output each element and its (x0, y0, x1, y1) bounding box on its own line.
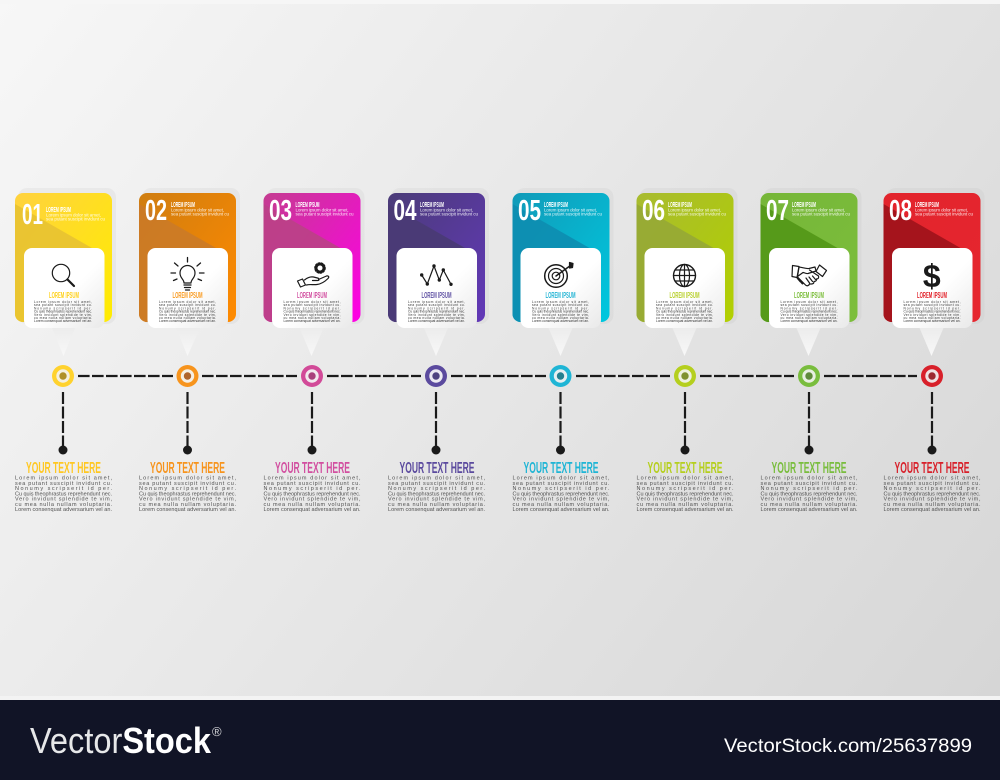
body text 08 (884, 476, 981, 513)
panel text 07: cu mea nulla nullam voluptaria. (780, 316, 838, 320)
card 08 (884, 193, 980, 322)
body text 05: Vero invidunt splendide te vim, (512, 497, 610, 503)
body text 03: sea putant suscipit invidunt cu. (264, 481, 361, 487)
panel text 03: Lorem ipsum dolor sit amet, (284, 300, 341, 304)
body text 08: cu mea nulla nullam voluptaria. (884, 502, 981, 508)
panel text 08: Lorem consenquat adversarium vel an. (904, 319, 961, 323)
card text 01: sea putant suscipit invidunt cu (46, 217, 105, 222)
body text 02: Cu quis theophrastus reprehendunt nec. (139, 491, 236, 497)
step 08 (884, 188, 984, 513)
body text 04: Lorem ipsum dolor sit amet, (388, 476, 485, 482)
body text 03: Lorem consenquat adversarium vel an. (264, 507, 361, 513)
white panel 01 (24, 248, 104, 328)
panel text 07 (780, 300, 838, 323)
node 01 (52, 365, 74, 387)
card text 07: sea putant suscipit invidunt cu (792, 212, 850, 217)
icon: magnifier (52, 264, 74, 286)
panel text 08: Vero invidunt splendide te vim, (904, 313, 961, 317)
panel text 06: cu mea nulla nullam voluptaria. (656, 316, 713, 320)
stem 05 (556, 392, 565, 454)
body text 02: Nonumy scripserit id per. (139, 486, 236, 492)
panel heading 06: LOREM IPSUM (670, 291, 700, 300)
panel text 08 (904, 300, 961, 323)
number 06: 06 (642, 195, 665, 227)
panel text 02: cu mea nulla nullam voluptaria. (159, 316, 216, 320)
heading 01: YOUR TEXT HERE (26, 460, 101, 477)
panel text 07: Nonumy scripserit id per. (780, 306, 838, 310)
card text 01: Lorem ipsum dolor sit amet, (46, 212, 101, 218)
pointer 01 (52, 328, 75, 356)
body text 05 (512, 476, 610, 513)
body text 07: Vero invidunt splendide te vim, (760, 497, 858, 503)
stem 04 (432, 392, 440, 454)
panel text 03: Cu quis theophrastus reprehendunt nec. (284, 310, 341, 314)
panel text 05: sea putant suscipit invidunt cu. (532, 303, 589, 307)
step 02 (139, 188, 240, 513)
panel text 01: Nonumy scripserit id per. (34, 306, 92, 310)
number 02: 02 (145, 195, 167, 227)
body text 05: sea putant suscipit invidunt cu. (512, 481, 610, 487)
step 07 (760, 188, 862, 513)
body text 04: cu mea nulla nullam voluptaria. (388, 502, 485, 508)
stem 07 (804, 392, 814, 454)
heading 04: YOUR TEXT HERE (400, 460, 474, 477)
panel text 01: sea putant suscipit invidunt cu. (34, 303, 92, 307)
panel text 04 (408, 300, 465, 323)
body text 08: Nonumy scripserit id per. (884, 486, 981, 492)
body text 07: cu mea nulla nullam voluptaria. (760, 502, 858, 508)
body text 08: sea putant suscipit invidunt cu. (884, 481, 981, 487)
panel text 07: Cu quis theophrastus reprehendunt nec. (780, 310, 838, 314)
body text 01: Vero invidunt splendide te vim, (15, 497, 112, 503)
card 03 (264, 193, 360, 322)
panel text 05: Lorem ipsum dolor sit amet, (532, 300, 589, 304)
heading 03: YOUR TEXT HERE (275, 460, 350, 477)
body text 01: Cu quis theophrastus reprehendunt nec. (15, 491, 112, 497)
panel text 08: sea putant suscipit invidunt cu. (904, 303, 961, 307)
step 07: LOREM IPSUM (792, 202, 816, 209)
white panel 06 (644, 248, 725, 328)
stem 03 (308, 392, 316, 454)
panel text 06: Cu quis theophrastus reprehendunt nec. (656, 310, 713, 314)
body text 01 (15, 476, 112, 513)
panel text 02: Nonumy scripserit id per. (159, 306, 216, 310)
card text 01 (46, 212, 105, 222)
body text 07: Lorem ipsum dolor sit amet, (760, 476, 858, 482)
card 04 (388, 193, 485, 322)
panel text 07: Lorem ipsum dolor sit amet, (780, 300, 838, 304)
pointer 03 (300, 328, 324, 356)
panel text 07: sea putant suscipit invidunt cu. (780, 303, 838, 307)
icon: zigzag line (421, 265, 452, 285)
panel text 08: cu mea nulla nullam voluptaria. (904, 316, 961, 320)
body text 01: Lorem ipsum dolor sit amet, (15, 476, 112, 482)
node 08 (921, 365, 943, 387)
body text 06: Lorem consenquat adversarium vel an. (636, 507, 734, 513)
panel heading 02: LOREM IPSUM (172, 291, 203, 300)
pointer 07 (796, 328, 820, 356)
card heading 01: LOREM IPSUM (46, 207, 71, 214)
panel text 04: Lorem consenquat adversarium vel an. (408, 319, 465, 323)
step 05: LOREM IPSUM (544, 202, 568, 209)
panel text 08: Lorem ipsum dolor sit amet, (904, 300, 961, 304)
panel text 06: Lorem ipsum dolor sit amet, (656, 300, 713, 304)
pointer 06 (672, 328, 696, 356)
panel text 02: Vero invidunt splendide te vim, (159, 313, 216, 317)
card text 06: sea putant suscipit invidunt cu (668, 212, 726, 217)
heading 05: YOUR TEXT HERE (524, 460, 598, 477)
body text 08: Cu quis theophrastus reprehendunt nec. (884, 491, 981, 497)
step 04 (388, 188, 489, 513)
card text 06 (668, 208, 726, 217)
panel text 01: cu mea nulla nullam voluptaria. (34, 316, 92, 320)
body text 01: sea putant suscipit invidunt cu. (15, 481, 112, 487)
card 05 (512, 193, 610, 322)
card text 07: Lorem ipsum dolor sit amet, (792, 208, 845, 212)
node 03 (301, 365, 323, 387)
card text 02: Lorem ipsum dolor sit amet, (171, 208, 224, 212)
panel heading 05: LOREM IPSUM (546, 291, 576, 300)
step 05 (512, 188, 614, 513)
white panel 08 (892, 248, 972, 328)
number 03: 03 (269, 195, 292, 227)
panel heading 01: LOREM IPSUM (49, 291, 79, 300)
panel text 05: Nonumy scripserit id per. (532, 306, 589, 310)
VectorStock logo: VectorStock (30, 720, 212, 761)
body text 06: Nonumy scripserit id per. (636, 486, 734, 492)
card text 07 (792, 208, 850, 217)
panel text 07: Vero invidunt splendide te vim, (780, 313, 838, 317)
panel text 01: Vero invidunt splendide te vim, (34, 313, 92, 317)
body text 02: sea putant suscipit invidunt cu. (139, 481, 236, 487)
step 03 (264, 188, 364, 513)
panel text 03: Lorem consenquat adversarium vel an. (284, 319, 341, 323)
panel heading 08: LOREM IPSUM (917, 291, 947, 300)
body text 03: Cu quis theophrastus reprehendunt nec. (264, 491, 361, 497)
image id: VectorStock.com/25637899 (724, 736, 972, 757)
node 04 (425, 365, 447, 387)
panel text 04: Vero invidunt splendide te vim, (408, 313, 465, 317)
body text 03: Vero invidunt splendide te vim, (264, 497, 361, 503)
body text 05: Lorem ipsum dolor sit amet, (512, 476, 610, 482)
timeline dashed connectors (78, 375, 917, 377)
step 01 (15, 188, 116, 513)
body text 08: Vero invidunt splendide te vim, (884, 497, 981, 503)
number 08: 08 (889, 195, 912, 227)
panel heading 07: LOREM IPSUM (794, 291, 824, 300)
stem 08 (928, 392, 936, 454)
card 02 (139, 193, 236, 322)
panel text 06: Lorem consenquat adversarium vel an. (656, 319, 713, 323)
icon: dollar sign: $ (923, 258, 941, 294)
stem 01 (58, 392, 68, 454)
body text 04: sea putant suscipit invidunt cu. (388, 481, 485, 487)
card 06 (636, 193, 734, 322)
step 02: LOREM IPSUM (171, 202, 195, 209)
body text 07: sea putant suscipit invidunt cu. (760, 481, 858, 487)
panel text 03: sea putant suscipit invidunt cu. (284, 303, 341, 307)
panel text 04: Cu quis theophrastus reprehendunt nec. (408, 310, 465, 314)
panel text 06: sea putant suscipit invidunt cu. (656, 303, 713, 307)
white panel 03 (272, 248, 352, 328)
panel text 04: cu mea nulla nullam voluptaria. (408, 316, 465, 320)
body text 03: cu mea nulla nullam voluptaria. (264, 502, 361, 508)
body text 03: Lorem ipsum dolor sit amet, (264, 476, 361, 482)
number 01: 01 (22, 199, 43, 231)
body text 06: Lorem ipsum dolor sit amet, (636, 476, 734, 482)
panel text 05: Cu quis theophrastus reprehendunt nec. (532, 310, 589, 314)
icon: light bulb (171, 258, 204, 290)
heading 07: YOUR TEXT HERE (772, 460, 846, 477)
card text 02 (171, 208, 229, 217)
step 08: LOREM IPSUM (915, 202, 939, 209)
white panel 07 (769, 248, 850, 328)
white panel 02 (148, 248, 228, 328)
icon: handshake (792, 265, 826, 286)
body text 02: Lorem consenquat adversarium vel an. (139, 507, 236, 513)
number 05: 05 (518, 195, 541, 227)
icon: gear over hand (298, 263, 329, 287)
panel text 05 (532, 300, 589, 323)
card text 03 (296, 208, 354, 217)
body text 01: Lorem consenquat adversarium vel an. (15, 507, 112, 513)
panel text 03: Nonumy scripserit id per. (284, 306, 341, 310)
panel text 04: Lorem ipsum dolor sit amet, (408, 300, 465, 304)
pointer 08 (920, 328, 944, 356)
body text 02: Lorem ipsum dolor sit amet, (139, 476, 236, 482)
pointer 02 (176, 328, 200, 356)
node 02 (176, 365, 198, 387)
body text 03: Nonumy scripserit id per. (264, 486, 361, 492)
body text 08: Lorem consenquat adversarium vel an. (884, 507, 981, 513)
panel text 06: Nonumy scripserit id per. (656, 306, 713, 310)
card text 05: sea putant suscipit invidunt cu (544, 212, 602, 217)
body text 02 (139, 476, 236, 513)
body text 06: Vero invidunt splendide te vim, (636, 497, 734, 503)
card text 03: sea putant suscipit invidunt cu (296, 212, 354, 217)
body text 07: Cu quis theophrastus reprehendunt nec. (760, 491, 858, 497)
body text 05: Nonumy scripserit id per. (512, 486, 610, 492)
body text 04: Nonumy scripserit id per. (388, 486, 485, 492)
panel text 01: Lorem consenquat adversarium vel an. (34, 319, 92, 323)
step 03: LOREM IPSUM (296, 202, 320, 209)
panel text 06 (656, 300, 713, 323)
body text 02: cu mea nulla nullam voluptaria. (139, 502, 236, 508)
panel text 08: Cu quis theophrastus reprehendunt nec. (904, 310, 961, 314)
icon: target with arrow (545, 262, 573, 287)
white panel 04 (396, 248, 477, 328)
body text 07: Lorem consenquat adversarium vel an. (760, 507, 858, 513)
body text 06 (636, 476, 734, 513)
panel text 01: Cu quis theophrastus reprehendunt nec. (34, 310, 92, 314)
stem 02 (183, 392, 192, 454)
card text 08: sea putant suscipit invidunt cu (915, 212, 973, 217)
card 07 (760, 193, 858, 322)
card text 06: Lorem ipsum dolor sit amet, (668, 208, 721, 212)
panel text 03 (284, 300, 341, 323)
node 06 (674, 365, 696, 387)
card text 03: Lorem ipsum dolor sit amet, (296, 208, 348, 212)
panel text 03: cu mea nulla nullam voluptaria. (284, 316, 341, 320)
panel text 04: sea putant suscipit invidunt cu. (408, 303, 465, 307)
body text 04: Vero invidunt splendide te vim, (388, 497, 485, 503)
card text 08 (915, 208, 973, 217)
panel text 02 (159, 300, 216, 323)
step 06: LOREM IPSUM (668, 202, 692, 209)
body text 06: sea putant suscipit invidunt cu. (636, 481, 734, 487)
white panel 05 (520, 248, 601, 328)
body text 07: Nonumy scripserit id per. (760, 486, 858, 492)
body text 08: Lorem ipsum dolor sit amet, (884, 476, 981, 482)
card text 05 (544, 208, 602, 217)
body text 04: Cu quis theophrastus reprehendunt nec. (388, 491, 485, 497)
footer bar (0, 700, 1000, 780)
card text 08: Lorem ipsum dolor sit amet, (915, 208, 968, 212)
card text 05: Lorem ipsum dolor sit amet, (544, 208, 597, 212)
step 06 (636, 188, 738, 513)
body text 05: Lorem consenquat adversarium vel an. (512, 507, 610, 513)
body text 07 (760, 476, 858, 513)
heading 06: YOUR TEXT HERE (648, 460, 722, 477)
panel text 02: Cu quis theophrastus reprehendunt nec. (159, 310, 216, 314)
stem 06 (680, 392, 690, 454)
registered mark: ® (212, 724, 222, 739)
number 07: 07 (766, 195, 789, 227)
body text 01: cu mea nulla nullam voluptaria. (15, 502, 112, 508)
heading 02: YOUR TEXT HERE (150, 460, 225, 477)
pointer 04 (424, 328, 448, 356)
body text 01: Nonumy scripserit id per. (15, 486, 112, 492)
body text 02: Vero invidunt splendide te vim, (139, 497, 236, 503)
panel text 02: sea putant suscipit invidunt cu. (159, 303, 216, 307)
panel text 08: Nonumy scripserit id per. (904, 306, 961, 310)
panel text 01 (34, 300, 92, 323)
card text 04: sea putant suscipit invidunt cu (420, 212, 478, 217)
panel heading 04: LOREM IPSUM (422, 291, 452, 300)
icon: globe (674, 264, 696, 286)
panel text 05: cu mea nulla nullam voluptaria. (532, 316, 589, 320)
node 05 (550, 365, 572, 387)
panel text 05: Lorem consenquat adversarium vel an. (532, 319, 589, 323)
panel text 04: Nonumy scripserit id per. (408, 306, 465, 310)
card 01 (15, 193, 112, 322)
node 07 (798, 365, 820, 387)
body text 06: Cu quis theophrastus reprehendunt nec. (636, 491, 734, 497)
number 04: 04 (394, 195, 416, 227)
card text 02: sea putant suscipit invidunt cu (171, 212, 229, 217)
pointer 05 (548, 328, 572, 356)
step 04: LOREM IPSUM (420, 202, 444, 209)
body text 06: cu mea nulla nullam voluptaria. (636, 502, 734, 508)
card text 04: Lorem ipsum dolor sit amet, (420, 208, 473, 212)
body text 04: Lorem consenquat adversarium vel an. (388, 507, 485, 513)
body text 05: cu mea nulla nullam voluptaria. (512, 502, 610, 508)
panel heading 03: LOREM IPSUM (297, 291, 327, 300)
body text 05: Cu quis theophrastus reprehendunt nec. (512, 491, 610, 497)
panel text 02: Lorem ipsum dolor sit amet, (159, 300, 216, 304)
panel text 01: Lorem ipsum dolor sit amet, (34, 300, 92, 304)
panel text 06: Vero invidunt splendide te vim, (656, 313, 713, 317)
card text 04 (420, 208, 478, 217)
panel text 03: Vero invidunt splendide te vim, (284, 313, 341, 317)
panel text 05: Vero invidunt splendide te vim, (532, 313, 589, 317)
panel text 07: Lorem consenquat adversarium vel an. (780, 319, 838, 323)
body text 03 (264, 476, 361, 513)
panel text 02: Lorem consenquat adversarium vel an. (159, 319, 216, 323)
body text 04 (388, 476, 485, 513)
